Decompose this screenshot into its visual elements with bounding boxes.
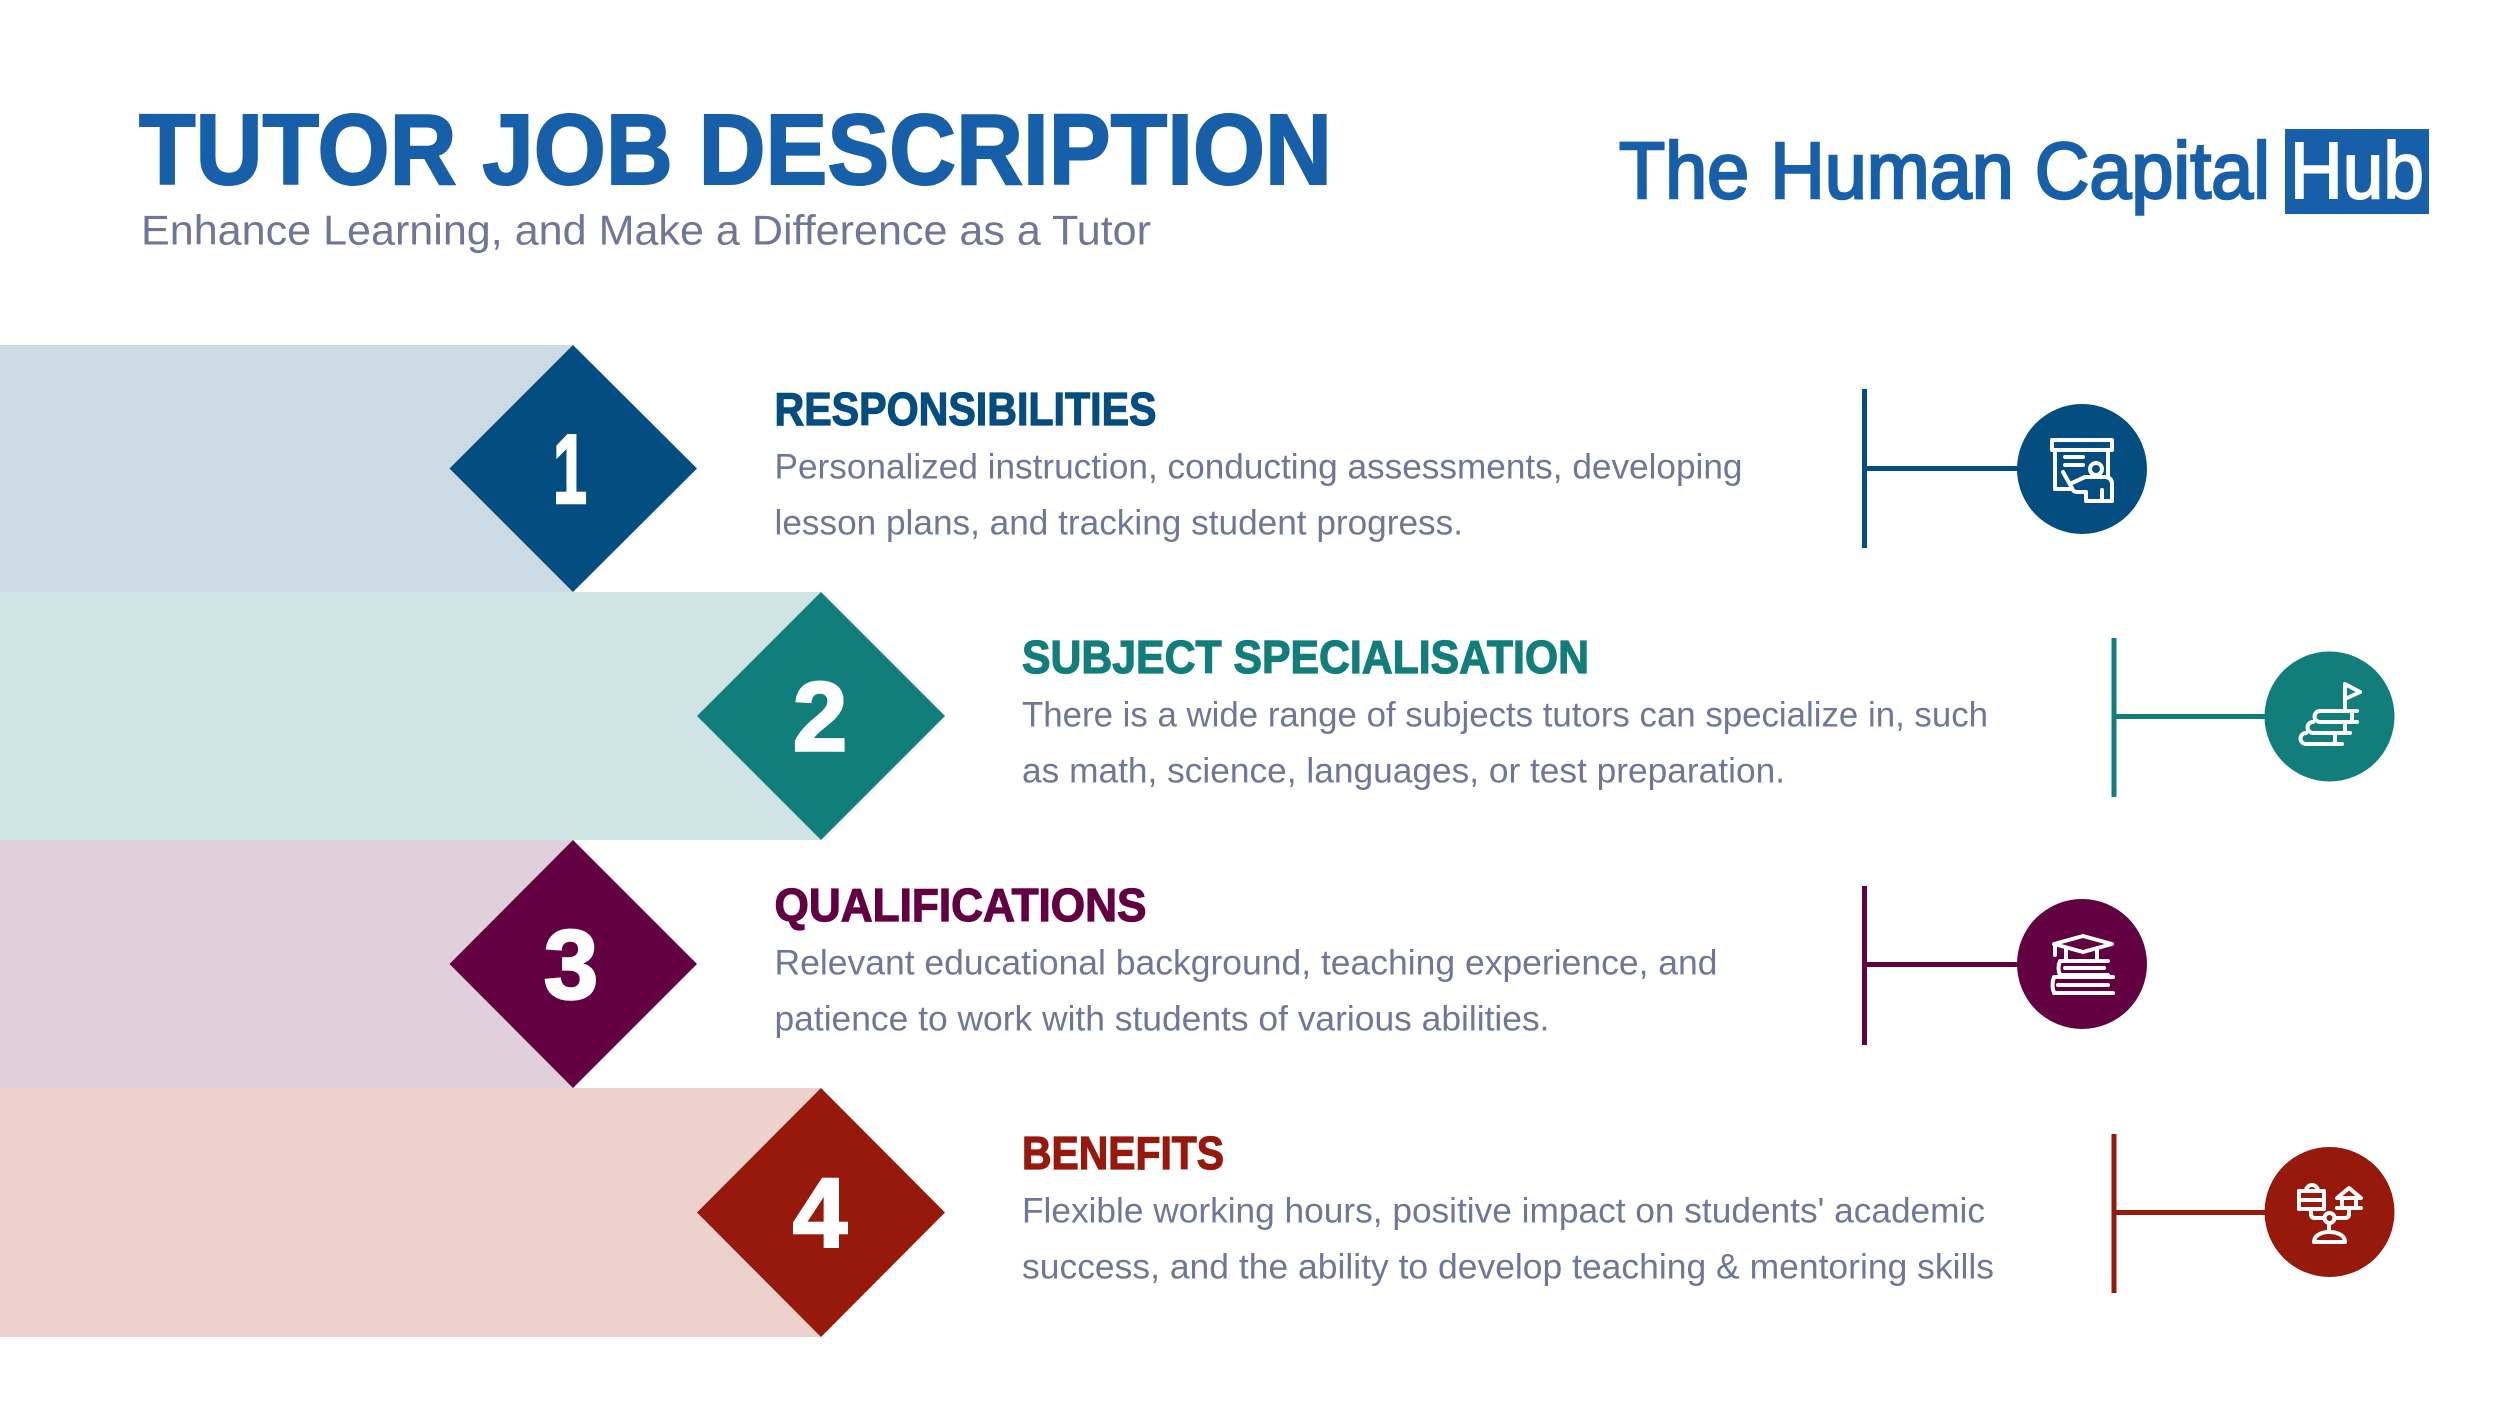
band 3 [0, 840, 573, 1088]
body text: responsibilities: lesson plans, and tracking student progress. [774, 504, 1463, 542]
heading: subject specialisation: SUBJECT SPECIALISATION [1022, 631, 1589, 683]
band 4 [0, 1088, 821, 1337]
panel: responsibilities [0, 345, 2147, 592]
body text: qualifications: patience to work with students of various abilities. [774, 1000, 1550, 1038]
icon: books with flag [2264, 652, 2394, 782]
diamond 4 with number [697, 1088, 945, 1337]
panel: subject specialisation [0, 592, 2394, 840]
diamond 2 with number [697, 592, 945, 840]
heading: responsibilities: RESPONSIBILITIES [774, 383, 1156, 435]
icon: work-life balance scale [2264, 1147, 2394, 1277]
diamond 4 with number: 4 [793, 1158, 847, 1268]
body text: benefits [1022, 1192, 1994, 1286]
body text: responsibilities: Personalized instruction, conducting assessments, developing [774, 448, 1742, 486]
icon: graduation cap on books [2017, 899, 2147, 1029]
subtitle: Enhance Learning, and Make a Difference as a Tutor [141, 206, 1151, 254]
body text: subject specialisation [1022, 696, 1988, 790]
logo: Hub [2290, 126, 2424, 215]
body text: responsibilities [774, 448, 1742, 542]
panel: benefits [0, 1088, 2394, 1337]
logo: The Human Capital [1619, 126, 2270, 215]
connector 2 [2114, 638, 2275, 797]
heading: benefits: BENEFITS [1022, 1127, 1224, 1179]
connector 4 [2114, 1134, 2275, 1293]
diamond 3 with number: 3 [544, 910, 598, 1020]
diamond 1 with number: 1 [553, 414, 587, 524]
body text: qualifications [774, 944, 1718, 1038]
diamond 1 with number [450, 345, 697, 592]
panel: qualifications [0, 840, 2147, 1088]
title: TUTOR JOB DESCRIPTION [139, 94, 1332, 206]
icon: teacher at board [2017, 404, 2147, 534]
diamond 3 with number [450, 840, 697, 1088]
connector 3 [1864, 886, 2030, 1045]
body text: qualifications: Relevant educational background, teaching experience, and [774, 944, 1718, 982]
connector 1 [1864, 389, 2030, 548]
body text: subject specialisation: There is a wide range of subjects tutors can specialize in, such [1022, 696, 1988, 734]
band 1 [0, 345, 573, 592]
band 2 [0, 592, 821, 840]
body text: subject specialisation: as math, science, languages, or test preparation. [1022, 752, 1785, 790]
body text: benefits: Flexible working hours, positive impact on students' academic [1022, 1192, 1985, 1230]
body text: benefits: success, and the ability to develop teaching & mentoring skills [1022, 1248, 1994, 1286]
diamond 2 with number: 2 [793, 662, 847, 772]
heading: qualifications: QUALIFICATIONS [774, 879, 1146, 931]
